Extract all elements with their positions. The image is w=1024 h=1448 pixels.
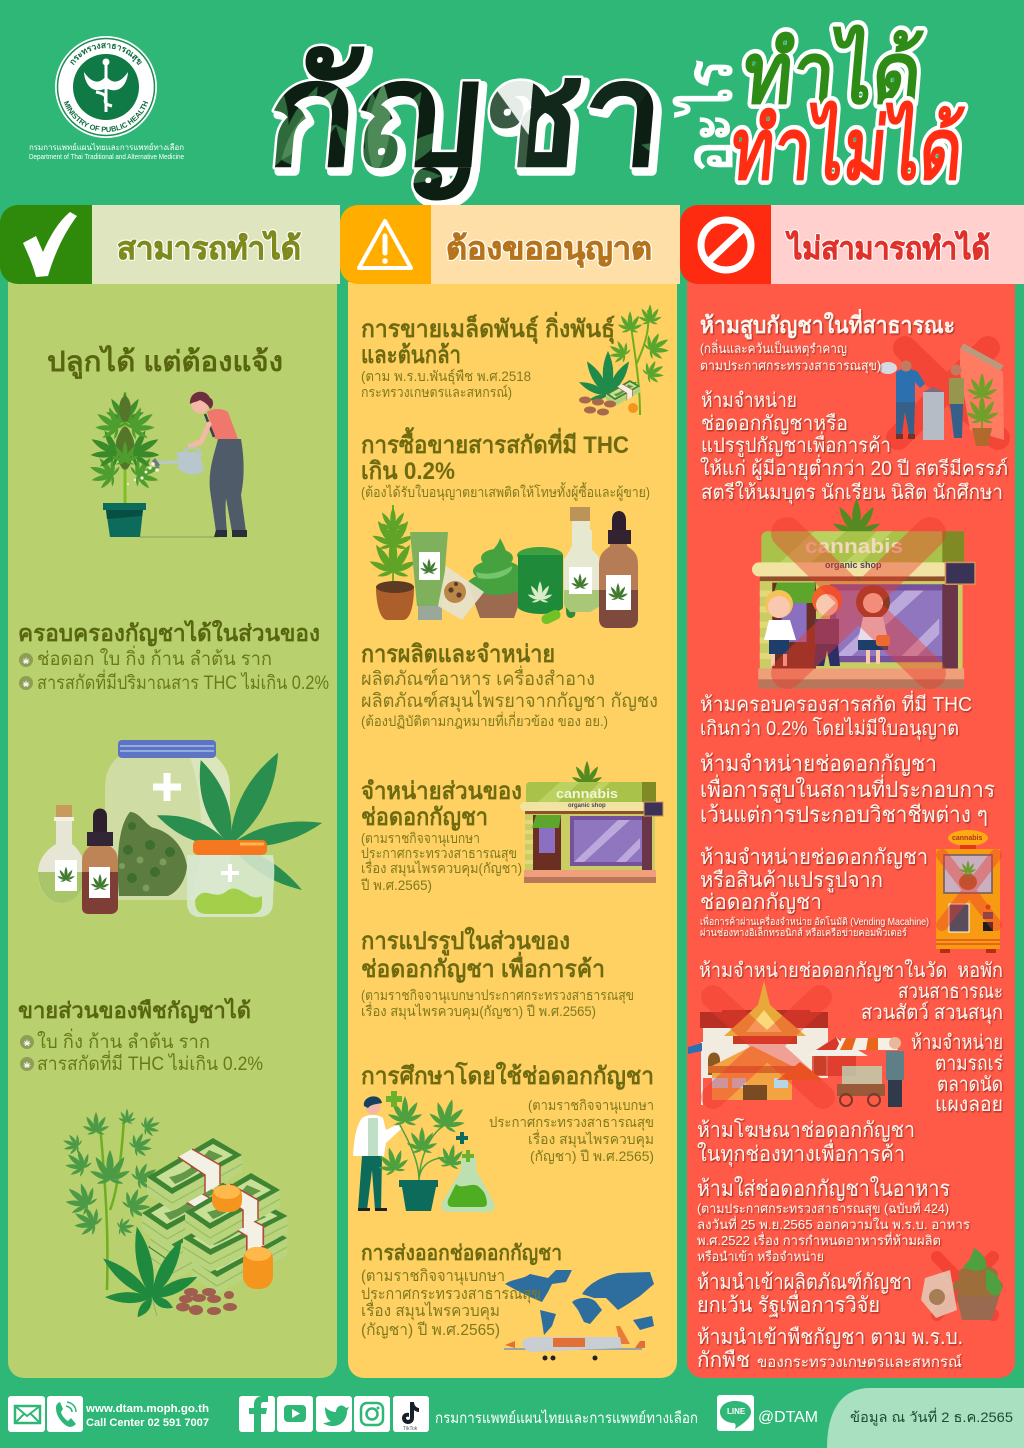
text: places prohibited: ตลาดนัด (937, 1074, 1003, 1096)
block: seeds and seedlings: กระทรวงเกษตรและสหกรณ์) (361, 384, 512, 400)
illustration: woman watering a plant (81, 392, 247, 537)
title: กัญชา: กัญชา (265, 37, 676, 205)
text: advertising, food, import prohibitions: พ.ศ.2522 เรื่อง การกำหนดอาหารที่ห้ามผลิต (697, 1232, 941, 1248)
illustration: shop with students, crossed out: cannabis (805, 536, 903, 558)
text: prohibition block 2: เกินกว่า 0.2% โดยไม่มีใบอนุญาต (700, 717, 959, 741)
header: can do: สามารถทำได้ (117, 230, 301, 266)
illustration: jars, bottles and leaf (38, 740, 325, 917)
text: advertising, food, import prohibitions: ของกระทรวงเกษตรและสหกรณ์ (757, 1354, 962, 1371)
header: permit required (340, 205, 680, 284)
block: retail sale: เรื่อง สมุนไพรควบคุม(กัญชา) (361, 859, 522, 877)
block: THC extracts: เกิน 0.2% (361, 458, 455, 485)
block: retail sale: ปี พ.ศ.2565) (361, 877, 432, 893)
text: advertising, food, import prohibitions: ในทุกช่องทางเพื่อการค้า (697, 1139, 905, 1167)
footer: contact icons (8, 1396, 83, 1432)
heading: grow with notice: ปลูกได้ แต่ต้องแจ้ง (47, 345, 283, 379)
block: produce and distribute: การผลิตและจำหน่าย (361, 641, 555, 668)
block: retail sale: ช่อดอกกัญชา (361, 804, 488, 831)
text: export legal note: ประกาศกระทรวงสาธารณสุข (361, 1286, 541, 1304)
text: prohibition block 2: ผ่านช่องทางอิเล็กทรอนิกส์ หรือเครือข่ายคอมพิวเตอร์ (700, 925, 908, 939)
block: export: การส่งออกช่อดอกกัญชา (361, 1242, 562, 1266)
text: places prohibited: ห้ามจำหน่าย (911, 1032, 1003, 1054)
list: sale allowed: ใบ กิ่ง ก้าน ลำต้น ราก (37, 1028, 210, 1053)
footer: LINE icon: LINE (727, 1407, 746, 1416)
text: prohibition block 2: ห้ามครอบครองสารสกัด ที่มี THC (700, 690, 972, 716)
text: export legal note: (ตามราชกิจจานุเบกษา (361, 1268, 505, 1286)
block: THC extracts: (ต้องได้รับใบอนุญาตยาเสพติดให้โทษทั้งผู้ซื้อและผู้ขาย) (361, 482, 650, 501)
block: education: (ตามราชกิจจานุเบกษา (528, 1097, 654, 1114)
text: prohibition block 2: เว้นแต่การประกอบวิชาชีพต่าง ๆ (700, 802, 988, 827)
illustration: cannabis products (368, 505, 638, 628)
rotated word: อะไร: อะไร (672, 60, 745, 172)
illustration: vending machine (936, 830, 1000, 953)
logo: Ministry of Public Health (29, 36, 184, 161)
text: advertising, food, import prohibitions: ลงวันที่ 25 พ.ย.2565 ออกความใน พ.ร.บ. อาหาร (697, 1216, 970, 1232)
text: advertising, food, import prohibitions: ห้ามใส่ช่อดอกกัญชาในอาหาร (697, 1176, 950, 1201)
block: education: (กัญชา) ปี พ.ศ.2565) (530, 1148, 654, 1164)
text: export legal note: เรื่อง สมุนไพรควบคุม (361, 1299, 500, 1321)
header: can do (0, 205, 340, 284)
text: places prohibited: แผงลอย (935, 1094, 1003, 1116)
text: places prohibited: สวนสาธารณะ (898, 981, 1003, 1003)
block: processing: การแปรรูปในส่วนของ (361, 926, 570, 956)
block: retail sale: จำหน่ายส่วนของ (361, 778, 522, 805)
block: retail sale (361, 778, 522, 893)
block: seeds and seedlings: และต้นกล้า (361, 342, 461, 369)
block: produce and distribute: ผลิตภัณฑ์สมุนไพรยาจากกัญชา กัญชง (361, 690, 658, 713)
block: THC extracts: การซื้อขายสารสกัดที่มี THC (361, 426, 629, 459)
text: advertising, food, import prohibitions (697, 1118, 970, 1372)
text: prohibition block 1: ห้ามสูบกัญชาในที่สาธารณะ (700, 308, 955, 340)
block: retail sale: ประกาศกระทรวงสาธารณสุข (361, 845, 517, 862)
text: prohibition block 2: ช่อดอกกัญชา (700, 891, 822, 914)
list: possession allowed: ช่อดอก ใบ กิ่ง ก้าน ลำต้น ราก (37, 645, 272, 670)
illustration: cannabis shop: organic shop (568, 803, 606, 809)
block: seeds and seedlings: การขายเมล็ดพันธุ์ กิ่งพันธุ์ (361, 311, 615, 345)
panel: can do (0, 205, 340, 1378)
text: export legal note: (กัญชา) ปี พ.ศ.2565) (361, 1321, 500, 1339)
logo: Ministry of Public Health: กรมการแพทย์แผนไทยและการแพทย์ทางเลือก (29, 142, 184, 152)
block: processing (361, 926, 634, 1020)
panel: prohibited (680, 205, 1024, 1378)
text: places prohibited: สวนสัตว์ สวนสนุก (861, 1001, 1003, 1025)
text: places prohibited (699, 959, 1003, 1116)
footer: department name: กรมการแพทย์แผนไทยและการแพทย์ทางเลือก (435, 1409, 698, 1427)
footer: website and call center: www.dtam.moph.go.th (85, 1403, 209, 1415)
footer: website and call center: Call Center 02 591 7007 (86, 1417, 209, 1429)
text: prohibition block 2: หรือสินค้าแปรรูปจาก (700, 869, 883, 893)
illustration: temple, dormitory and market stall (688, 981, 904, 1107)
illustration: shop with students, crossed out: organic shop (825, 560, 882, 570)
text: advertising, food, import prohibitions: กักพืช (697, 1349, 750, 1372)
illustration: plant, money and seeds (57, 1109, 288, 1320)
list: sale allowed (20, 1028, 263, 1075)
text: prohibition block 1: ช่อดอกกัญชาหรือ (701, 413, 848, 435)
title: กัญชา: กัญชา (261, 33, 672, 201)
block: processing: เรื่อง สมุนไพรควบคุม(กัญชา) ปี พ.ศ.2565) (361, 1002, 596, 1020)
text: advertising, food, import prohibitions: ยกเว้น รัฐเพื่อการวิจัย (697, 1290, 880, 1317)
illustration: shop with students, crossed out (752, 498, 975, 689)
block: produce and distribute (361, 641, 658, 729)
header: prohibited: ไม่สามารถทำได้ (785, 230, 990, 266)
block: seeds and seedlings (361, 311, 615, 400)
list: sale allowed: สารสกัดที่มี THC ไม่เกิน 0.2% (37, 1050, 263, 1075)
illustration: cupcake and cookies, crossed out (921, 1248, 1003, 1320)
text: prohibition block 2: เพื่อการค้าผ่านเครื่องจำหน่าย อัตโนมัติ (Vending Macahine) (700, 914, 929, 928)
logo: Ministry of Public Health: MINISTRY OF PUBLIC HEALTH (64, 100, 148, 132)
block: THC extracts (361, 426, 650, 501)
block: education: เรื่อง สมุนไพรควบคุม (528, 1130, 654, 1148)
text: prohibition block 2 (700, 690, 995, 939)
footer: website and call center (85, 1403, 209, 1429)
text: prohibition block 1: ห้ามจำหน่าย (701, 390, 797, 412)
text: prohibition block 1: สตรีให้นมบุตร นักเรียน นิสิต นักศึกษา (701, 481, 1003, 505)
panel: permit required (340, 205, 680, 1378)
heading: sell plant parts: ขายส่วนของพืชกัญชาได้ (18, 997, 251, 1024)
block: education: การศึกษาโดยใช้ช่อดอกกัญชา (361, 1061, 654, 1090)
illustration: scientist, plant and flask (353, 1091, 495, 1212)
block: processing: (ตามราชกิจจานุเบกษาประกาศกระทรวงสาธารณสุข (361, 987, 634, 1004)
heading: possession: ครอบครองกัญชาได้ในส่วนของ (18, 619, 320, 647)
header: prohibited: ไม่สามารถทำได้ (785, 230, 990, 266)
block: processing: ช่อดอกกัญชา เพื่อการค้า (361, 951, 605, 983)
header: can do: สามารถทำได้ (117, 230, 301, 266)
block: seeds and seedlings: (ตาม พ.ร.บ.พันธุ์พืช พ.ศ.2518 (361, 368, 531, 385)
illustration: plant, money and seeds small (577, 304, 675, 416)
text: prohibition block 2: เพื่อการสูบในสถานที่ประกอบการ (700, 774, 995, 803)
text: advertising, food, import prohibitions: ห้ามโฆษณาช่อดอกกัญชา (697, 1118, 915, 1142)
illustration: people smoking, crossed out (879, 346, 1004, 446)
illustration: cannabis shop: cannabis (556, 786, 618, 801)
block: retail sale: (ตามราชกิจจานุเบกษา (361, 830, 480, 847)
title: ทำได้: ทำได้ (739, 24, 926, 122)
logo: Ministry of Public Health: Department of Thai Traditional and Alternative Medicine (29, 154, 184, 161)
block: produce and distribute: ผลิตภัณฑ์อาหาร เครื่องสำอาง (361, 665, 595, 690)
text: prohibition block 1: แปรรูปกัญชาเพื่อการค้า (701, 431, 891, 458)
header: permit required: ต้องขออนุญาต (446, 231, 652, 268)
text: prohibition block 1: ให้แก่ ผู้มีอายุต่ำกว่า 20 ปี สตรีมีครรภ์ (700, 454, 1008, 481)
footer: LINE handle: @DTAM (758, 1409, 818, 1426)
text: advertising, food, import prohibitions: (ตามประกาศกระทรวงสาธารณสุข (ฉบับที่ 424) (697, 1200, 949, 1217)
block: produce and distribute: (ต้องปฏิบัติตามกฎหมายที่เกี่ยวข้อง ของ อย.) (361, 712, 608, 729)
footer: social media icons: TikTok (403, 1426, 418, 1432)
illustration: vending machine: cannabis (952, 835, 982, 842)
text: prohibition block 2: ห้ามจำหน่ายช่อดอกกัญชา (700, 846, 928, 869)
header: permit required: ต้องขออนุญาต (446, 231, 652, 268)
text: advertising, food, import prohibitions: หรือนำเข้า หรือจำหน่าย (697, 1249, 824, 1264)
text: advertising, food, import prohibitions: ห้ามนำเข้าพืชกัญชา ตาม พ.ร.บ. (697, 1326, 963, 1349)
footer: LINE icon (717, 1395, 754, 1431)
text: advertising, food, import prohibitions: ห้ามนำเข้าผลิตภัณฑ์กัญชา (697, 1270, 912, 1294)
text: prohibition block 2: ห้ามจำหน่ายช่อดอกกัญชา (700, 751, 937, 776)
block: education: ประกาศกระทรวงสาธารณสุข (489, 1114, 654, 1131)
footer: social media icons (239, 1396, 429, 1432)
text: prohibition block 1 (700, 308, 1008, 505)
footer: date tab: ข้อมูล ณ วันที่ 2 ธ.ค.2565 (850, 1408, 1013, 1426)
block: education (361, 1061, 654, 1164)
header: prohibited (680, 205, 1024, 284)
text: export legal note (361, 1268, 541, 1339)
footer: date tab (827, 1388, 1024, 1448)
list: possession allowed: สารสกัดที่มีปริมาณสาร THC ไม่เกิน 0.2% (37, 669, 329, 694)
text: prohibition block 1: (กลิ่นและควันเป็นเหตุรำคาญ (700, 339, 847, 357)
list: possession allowed (19, 645, 329, 694)
illustration: cannabis shop (520, 761, 663, 883)
logo: Ministry of Public Health: กระทรวงสาธารณสุข (70, 42, 142, 66)
text: places prohibited: ตามรถเร่ (935, 1053, 1003, 1075)
text: prohibition block 1: ตามประกาศกระทรวงสาธารณสุข) (700, 358, 881, 374)
illustration: world map and airplane (504, 1270, 654, 1360)
